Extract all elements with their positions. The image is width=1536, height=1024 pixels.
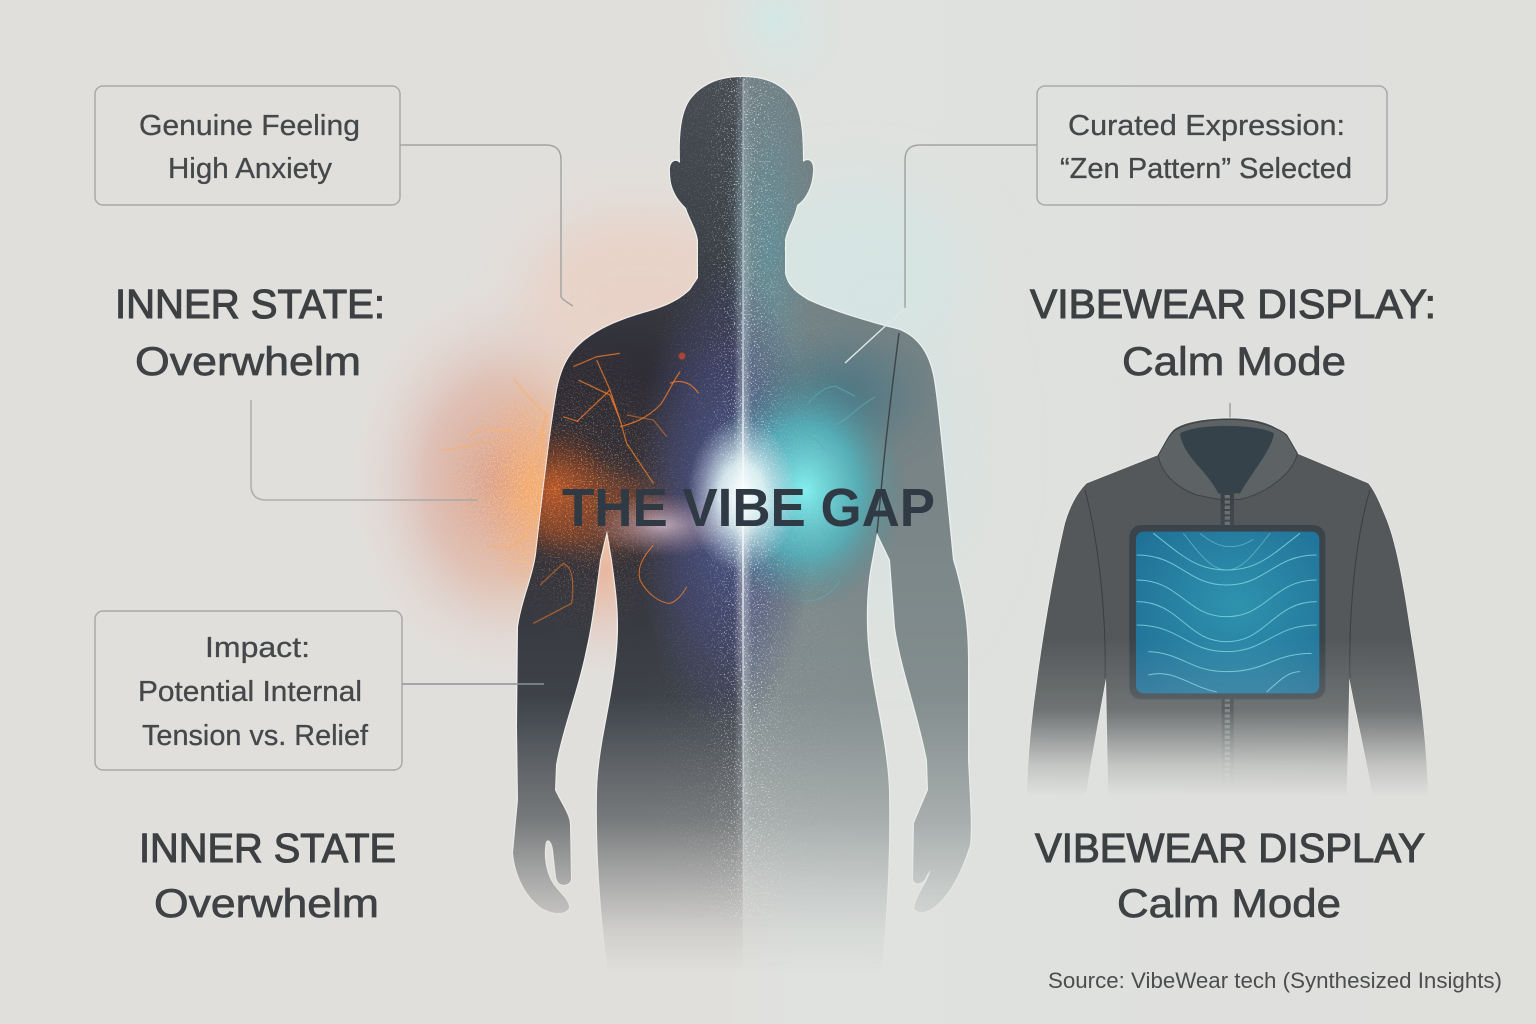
jacket collar (1158, 419, 1297, 500)
heading: vibewear display lower: VIBEWEAR DISPLAY (1035, 825, 1425, 871)
connector: overwhelm to glow (251, 400, 478, 500)
silhouette fill and inner glows (513, 77, 971, 956)
jacket zipper top (1221, 493, 1234, 527)
orange sparks outside figure (428, 352, 614, 626)
spark filaments (440, 377, 547, 547)
callout box: impact: Potential Internal (138, 676, 362, 708)
nerve lines: right chest (770, 386, 875, 601)
silhouette outline (512, 76, 972, 871)
heading: vibewear display lower (1035, 825, 1425, 926)
jacket zipper bottom (1222, 697, 1234, 783)
callout box: impact: Impact: (205, 632, 310, 664)
callout box: curated expression: “Zen Pattern” Selected (1060, 153, 1352, 185)
glow: orange aura (350, 210, 760, 675)
heading: vibewear display upper (1030, 281, 1436, 384)
connector: impact to body (402, 683, 544, 685)
callout box: curated expression (1037, 86, 1387, 205)
jacket body (1027, 418, 1428, 800)
callout box: genuine feeling: Genuine Feeling (139, 110, 360, 142)
heading: vibewear display lower: Calm Mode (1117, 882, 1341, 926)
central light seam (737, 78, 749, 968)
figure: human silhouette (512, 76, 972, 954)
heading: inner state lower: INNER STATE (139, 825, 396, 871)
orange particles on chest (522, 344, 688, 636)
jacket illustration (1027, 418, 1428, 800)
source note: Source: VibeWear tech (Synthesized Insights) (1048, 968, 1502, 993)
heading: vibewear display upper: VIBEWEAR DISPLAY: (1030, 281, 1436, 327)
callout box: impact: Tension vs. Relief (142, 720, 369, 752)
callout box: curated expression: Curated Expression: (1068, 110, 1345, 142)
connector: genuine feeling to figure (400, 145, 573, 306)
callout box: impact (95, 611, 402, 770)
heading: inner state upper: INNER STATE: (115, 281, 385, 327)
nerve lines: left chest (533, 353, 698, 623)
speckle particles (654, 77, 840, 920)
heading: vibewear display upper: Calm Mode (1122, 340, 1346, 384)
shoulder seam (877, 333, 899, 533)
display panel screen (1136, 532, 1319, 693)
callout box: genuine feeling: High Anxiety (168, 153, 333, 185)
top cyan glow (695, 0, 855, 110)
nerve node (678, 352, 686, 360)
calm wave pattern (1137, 533, 1317, 692)
callout box: genuine feeling (95, 86, 400, 205)
jacket seams (1085, 490, 1370, 678)
glow: cyan aura (750, 180, 1010, 680)
heading: inner state upper: Overwhelm (135, 340, 361, 384)
display panel frame (1129, 525, 1325, 699)
jacket neck opening (1180, 426, 1274, 493)
heading: inner state lower (139, 825, 396, 926)
heading: inner state upper (115, 281, 385, 384)
connector: display to jacket (1229, 403, 1231, 418)
heading: inner state lower: Overwhelm (154, 882, 379, 926)
title: THE VIBE GAP (562, 478, 935, 538)
connector: curated expression to chest (845, 145, 1037, 363)
